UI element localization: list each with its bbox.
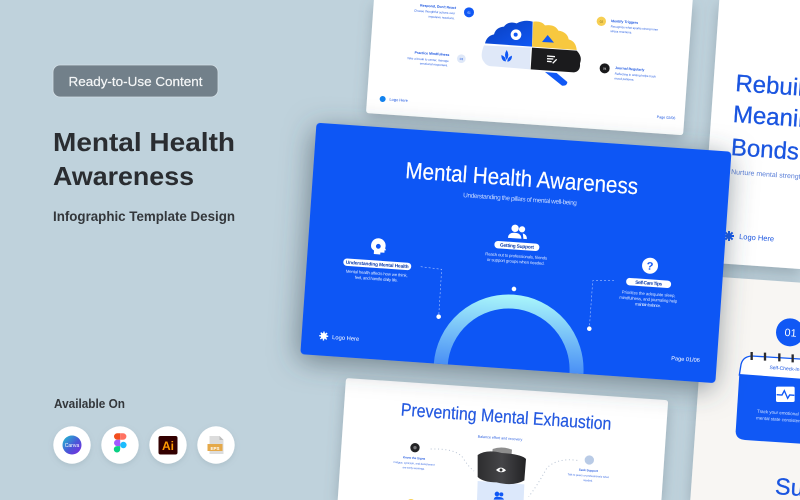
step badge 01	[776, 318, 800, 346]
subtitle: Balance effort and recovery	[478, 435, 523, 442]
logo: Logo Here	[332, 335, 359, 343]
semicircle arc	[434, 294, 584, 374]
item: self-care tips: Prioritize the adequate sleep,	[622, 289, 676, 298]
item: identify triggers	[597, 17, 658, 35]
item: seek support: needed.	[583, 478, 593, 483]
dotted connector right	[529, 460, 577, 497]
icon: eps file	[197, 426, 235, 464]
step badge 01: 01	[784, 327, 797, 340]
icon: canva: Canva	[65, 443, 79, 449]
item: know the signs: Know the Signs	[403, 455, 426, 461]
item: understanding mental health: feel, and handle daily life.	[355, 275, 398, 283]
panel: main blue slide	[296, 123, 731, 452]
calendar card: Track your emotional	[757, 409, 799, 417]
item: journal regularly: Journal Regularly	[615, 66, 645, 72]
icon: adobe illustrator: Ai	[162, 439, 174, 453]
heading: rebuilding meaningful bonds: Bonds	[730, 134, 800, 166]
item: know the signs	[393, 443, 435, 471]
item: identify triggers: Recognize what sparks strong inner	[611, 24, 658, 32]
item: practice mindfulness: 03	[460, 57, 464, 61]
item: self-care tips: ?	[646, 260, 654, 273]
subtitle: Understanding the pillars of mental well-being	[463, 192, 578, 207]
item: know the signs: Fatigue, cynicism, and detachment	[393, 460, 435, 467]
logo: Logo Here	[389, 97, 409, 103]
calendar card	[736, 352, 800, 444]
item: self-care tips: mindfulness, and journaling help	[619, 295, 678, 304]
item: identify triggers: 02	[600, 20, 604, 24]
page number: Page 01/06	[671, 356, 700, 364]
heading: preventing mental exhaustion: Preventing Mental Exhaustion	[400, 400, 612, 434]
panel: rebuilding bonds slide	[701, 0, 800, 269]
item: getting support	[485, 223, 549, 266]
item: self-care tips: maintain balance.	[635, 301, 661, 308]
dotted connector left	[431, 449, 474, 471]
heading: rebuilding meaningful bonds	[730, 70, 800, 166]
item: self-care tips: Self-Care Tips	[635, 280, 663, 288]
icon: eps file: EPS	[210, 446, 220, 451]
title: Mental Health Awareness	[405, 157, 639, 199]
connector left	[417, 267, 444, 319]
item badge yellow	[408, 498, 414, 500]
item: getting support: or support groups when needed.	[487, 257, 545, 266]
item: journal regularly: mood patterns.	[614, 76, 635, 82]
page number: Page 02/06	[657, 115, 676, 120]
item: identify triggers: stress reactions.	[610, 29, 632, 35]
panel: brain slide	[366, 0, 693, 135]
badge: ready-to-use content: Ready-to-Use Content	[68, 74, 203, 89]
item: getting support: Getting Support	[500, 243, 534, 251]
calendar card: Self-Check-In	[769, 365, 800, 373]
connector right	[587, 279, 614, 333]
battery illustration	[477, 447, 526, 500]
item: know the signs: are early warnings.	[402, 465, 425, 471]
item: identify triggers: Identify Triggers	[611, 19, 638, 25]
item: seek support: Talk to peers or professionals when	[567, 472, 610, 479]
item: seek support	[567, 455, 610, 483]
item: respond, don't react: Respond, Don't React	[420, 3, 457, 10]
item: understanding mental health: Understanding Mental Health	[346, 260, 409, 270]
item: journal regularly: Reflecting in writing helps track	[615, 72, 656, 79]
item: respond, don't react	[414, 3, 474, 20]
logo	[317, 329, 360, 345]
logo: Logo Here	[739, 232, 774, 243]
item: understanding mental health: Mental health affects how we think,	[346, 269, 408, 278]
item: practice mindfulness: Take a break to center, manage	[407, 56, 449, 63]
icon: figma	[101, 426, 139, 464]
heading: mental health awareness	[53, 127, 235, 191]
logo	[380, 96, 409, 103]
icon: canva	[53, 426, 91, 464]
connector center dot	[512, 287, 516, 291]
item: journal regularly	[600, 63, 656, 82]
heading: mental health awareness: Awareness	[53, 161, 194, 191]
item: practice mindfulness	[407, 51, 466, 67]
item: respond, don't react: 01	[467, 11, 471, 15]
icon: adobe illustrator	[149, 426, 187, 464]
item: journal regularly: 04	[603, 67, 607, 71]
label: available on: Available On	[54, 396, 125, 411]
brain illustration	[482, 21, 581, 86]
item: respond, don't react: Choose thoughtful actions over	[414, 8, 455, 15]
subheading: Infographic Template Design	[53, 208, 235, 224]
item: respond, don't react: impulsive reactions.	[428, 15, 455, 20]
badge: ready-to-use content	[53, 65, 218, 97]
item: getting support: Reach out to professionals, friends	[485, 251, 547, 261]
panel: preventing exhaustion slide	[338, 378, 668, 500]
item: understanding mental health	[342, 236, 413, 284]
item: practice mindfulness: Practice Mindfulness	[414, 51, 450, 57]
item: practice mindfulness: emotional responses.	[420, 61, 448, 67]
logo	[724, 231, 774, 243]
panel: self-check slide	[690, 276, 800, 500]
item: seek support: Seek Support	[579, 468, 598, 473]
heading: mental health awareness: Mental Health	[53, 127, 235, 157]
item: self-care tips	[619, 256, 681, 309]
